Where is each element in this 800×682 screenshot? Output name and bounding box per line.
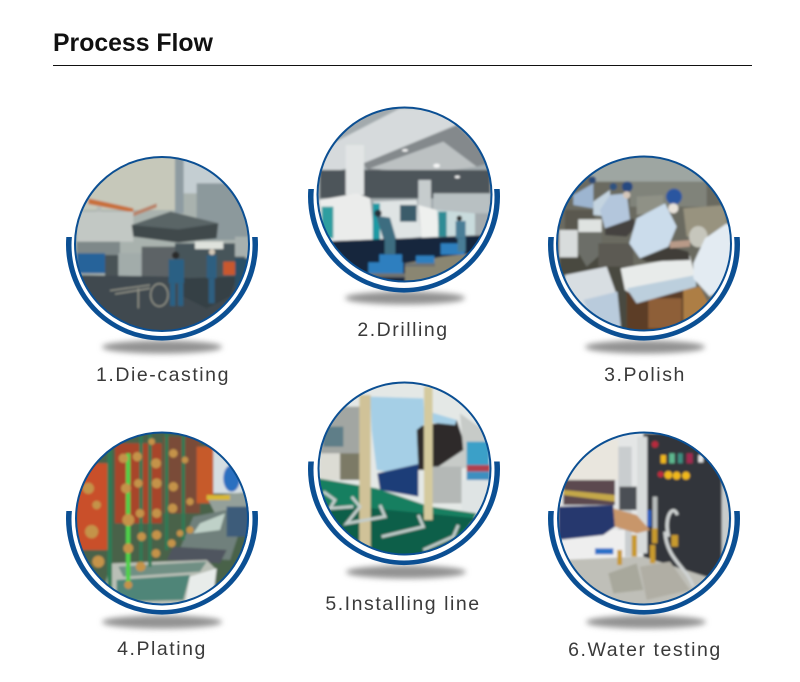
photo border [76,432,248,604]
shadow [102,616,222,628]
label: 5.Installing line [325,593,481,615]
photo border [75,157,249,331]
step 3: polish [548,153,740,386]
photo border [318,108,492,282]
label: 6.Water testing [568,639,722,661]
shadow [345,292,465,304]
photo: polishing workers [558,158,730,330]
shadow [585,340,705,354]
blue arc [66,511,258,615]
label: 3.Polish [604,364,686,386]
shadow [586,616,706,628]
label: 4.Plating [117,638,207,660]
blue arc [308,462,500,565]
title: Process Flow [53,30,214,57]
photo border [557,156,731,330]
photo border [558,432,730,604]
step 2: drilling [308,105,500,341]
blue arc [548,511,740,615]
photo: die-casting workshop [76,158,248,330]
photo: assembly line [320,384,490,556]
label: 1.Die-casting [96,364,230,386]
step 1: die-casting [66,153,258,386]
step 6: water testing [548,430,740,661]
photo: CNC machines [318,108,490,280]
label: 2.Drilling [357,319,449,341]
photo: water test bench [559,434,732,606]
blue arc [548,237,740,341]
blue arc [308,189,500,293]
step 4: plating [66,430,258,660]
shadow [102,340,222,354]
blue arc [66,237,258,341]
photo border [318,382,490,554]
photo: plating line [73,430,253,610]
step 5: installing line [308,380,500,615]
shadow [346,566,466,578]
